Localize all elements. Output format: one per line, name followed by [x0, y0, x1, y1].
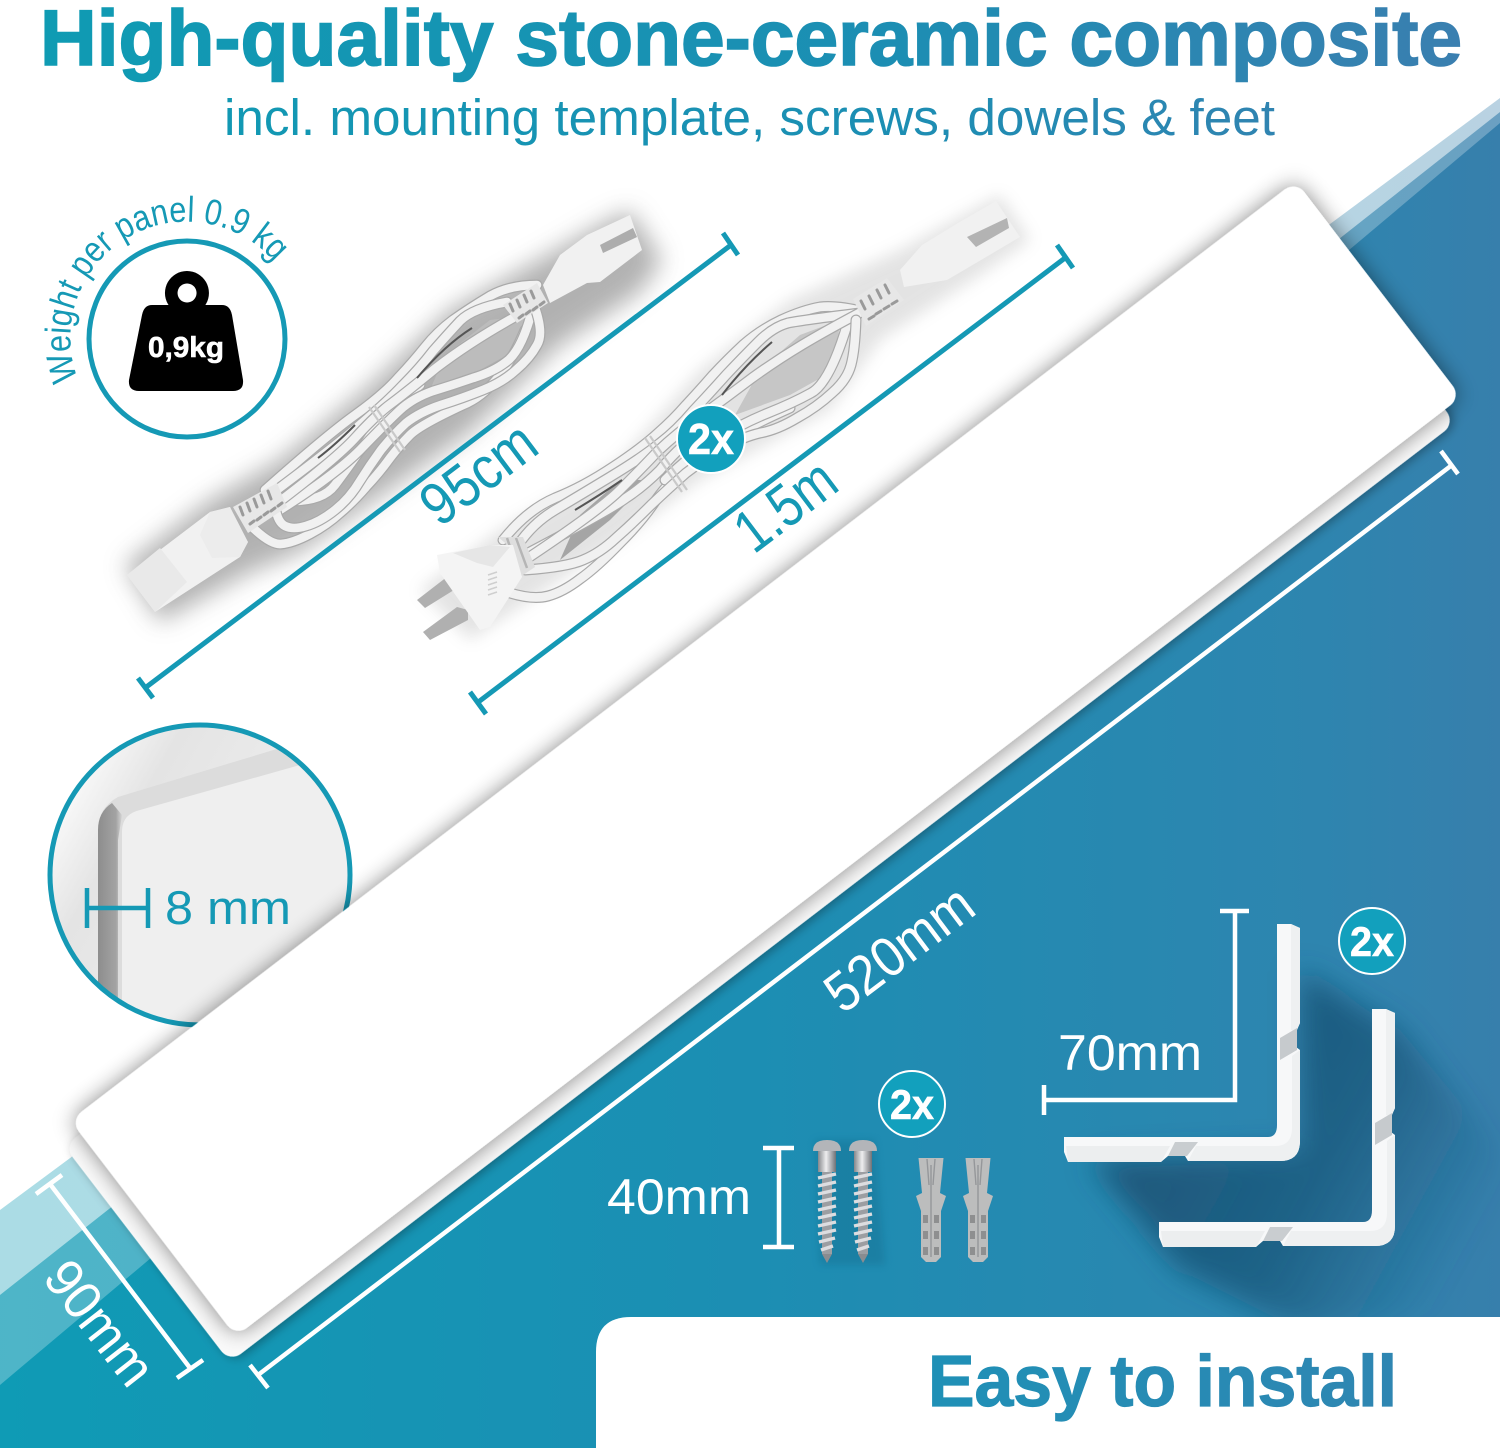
magnifier disc — [50, 725, 350, 1025]
shadow under hardware — [815, 1140, 885, 1265]
label: 90mm: 90mm — [32, 1249, 167, 1398]
left connector — [127, 483, 287, 612]
icon: weight — [129, 271, 243, 391]
badge: 2x cable — [677, 405, 745, 473]
bracket: second — [1159, 1009, 1395, 1247]
cable bundle — [250, 285, 540, 544]
weight badge — [44, 196, 288, 440]
bracket long shadows — [1090, 970, 1500, 1330]
label: 1.5m: 1.5m — [721, 446, 849, 565]
heading: subtitle: incl. mounting template, screws, dowels & feet — [224, 89, 1275, 146]
cable shadow — [125, 210, 662, 622]
8 mm measure — [87, 888, 148, 928]
magnifier ring — [50, 725, 350, 1025]
cable set 95cm — [125, 210, 662, 622]
badge: 2x brackets: 2x — [1350, 918, 1395, 965]
bracket: first — [1064, 924, 1300, 1162]
icon: weight: 0,9kg — [148, 332, 224, 364]
curved weight label: Weight per panel 0.9 kg — [44, 196, 287, 386]
dimension line: 40mm — [763, 1148, 794, 1247]
badge: 2x cable: 2x — [688, 415, 734, 464]
dimension line: 70mm — [1044, 911, 1249, 1115]
dimension line: 95cm — [138, 233, 738, 698]
cable bundle — [503, 307, 865, 597]
dimension line: 1.5m — [470, 245, 1073, 714]
screws and dowels — [813, 1140, 993, 1265]
label: 8 mm: 8 mm — [165, 881, 291, 934]
dowel right — [963, 1158, 993, 1262]
label: 95cm: 95cm — [407, 408, 550, 539]
badge: 2x brackets — [1339, 908, 1405, 974]
panel edge view — [98, 749, 298, 1000]
upper panel — [70, 181, 1461, 1336]
cable shadow — [420, 195, 1030, 640]
badge: 2x screws: 2x — [890, 1081, 935, 1128]
screw right — [849, 1140, 877, 1263]
dowel left — [916, 1158, 946, 1262]
dimension line: 520mm — [250, 451, 1458, 1388]
callout: easy to install — [596, 1317, 1500, 1448]
US plug — [417, 537, 535, 640]
magnifier: 8 mm edge detail — [50, 725, 352, 1040]
badge: 2x screws — [879, 1071, 945, 1137]
right connector — [503, 215, 642, 323]
far connector — [853, 201, 1020, 326]
label: 70mm: 70mm — [1058, 1025, 1202, 1081]
lower panel — [64, 207, 1455, 1362]
label: 520mm: 520mm — [812, 872, 986, 1025]
screw left — [813, 1140, 841, 1263]
cable set 1.5m — [417, 195, 1030, 640]
label: 40mm: 40mm — [607, 1169, 751, 1225]
callout: easy to install: Easy to install — [928, 1342, 1397, 1422]
dimension line: 90mm — [36, 1175, 203, 1378]
weight circle outline — [89, 241, 285, 437]
